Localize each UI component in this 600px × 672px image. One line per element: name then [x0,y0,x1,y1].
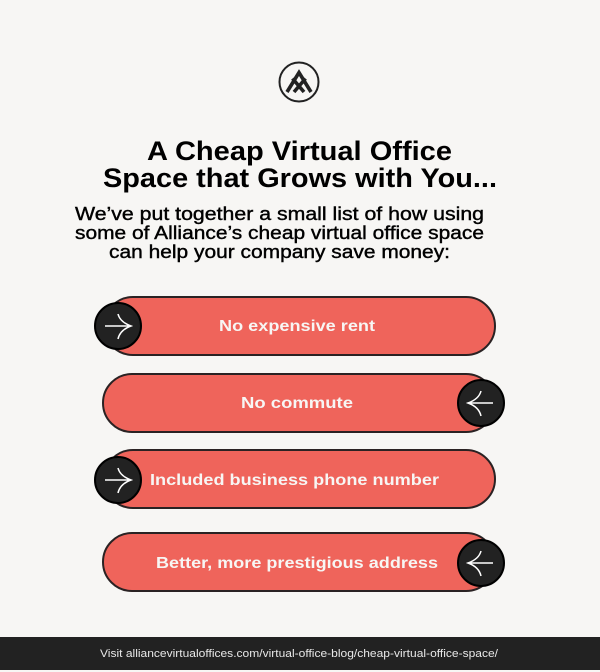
title: A Cheap Virtual Office [147,136,452,166]
icon: right arrow [95,303,141,349]
icon: left arrow [458,380,504,426]
footer bar: Visit alliancevirtualoffices.com/virtual-office-blog/cheap-virtual-office-space/ [100,648,499,660]
intro text: We’ve put together a small list of how using [75,203,484,224]
icon: right arrow [95,457,141,503]
icon: left arrow [458,540,504,586]
pill: better address [103,533,504,591]
intro text [75,203,484,262]
pill: no expensive rent [95,297,495,355]
pill: no commute [103,374,504,432]
footer bar [0,637,600,670]
pill: better address: Better, more prestigious address [156,555,438,572]
pill: included business phone number: Included business phone number [150,472,439,489]
title: Space that Grows with You... [103,163,497,193]
intro text: some of Alliance’s cheap virtual office space [75,222,484,243]
pill: no expensive rent: No expensive rent [219,318,376,335]
intro text: can help your company save money: [109,241,450,262]
title [103,136,497,193]
icon: Alliance logo [280,62,318,102]
pill: no commute: No commute [241,395,353,412]
pill: included business phone number [95,450,495,508]
